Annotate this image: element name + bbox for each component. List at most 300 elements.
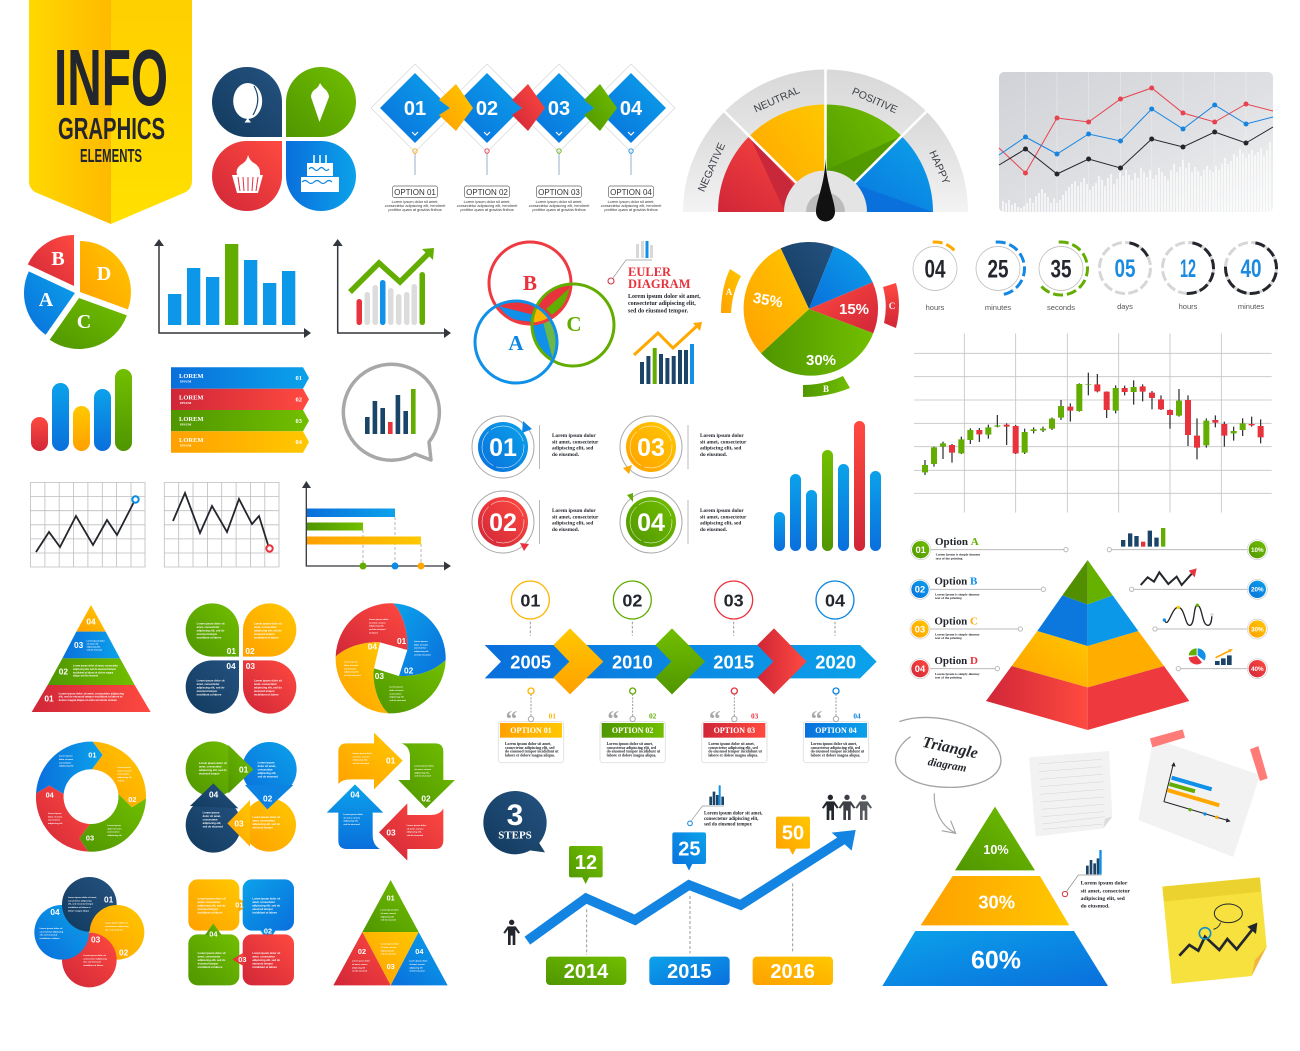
teardrop quad: amet, consectetur (254, 625, 277, 629)
tab C: C (889, 301, 895, 311)
option titles: Option C (934, 615, 978, 627)
arrow cycle: sed do eiusmod (353, 763, 370, 765)
rounded squares: amet, consectetur (252, 900, 275, 904)
gauge separators (723, 68, 928, 212)
step numbers: 01 (404, 98, 426, 120)
overlapping circles: incididunt ut labore et (68, 906, 91, 909)
ring cycle: consectetur (117, 773, 130, 776)
panel: 3D pyramid with options (910, 528, 1267, 730)
panel: gauge (683, 68, 968, 222)
layered triangle: sed do eiusmod (87, 650, 103, 652)
rounded squares: eiusmod tempor (198, 907, 218, 911)
body text: Lorem ipsum dolor sit amet, (628, 294, 701, 300)
circle captions: sit amet, consectetur (552, 439, 599, 445)
icon: wave (1163, 604, 1214, 625)
gauge needle (816, 158, 835, 222)
overlapping circles: Lorem ipsum dolor sit (40, 928, 62, 930)
teardrop quad: Lorem ipsum dolor sit (197, 679, 225, 682)
tab A (721, 269, 741, 313)
timer labels: hours (1179, 302, 1198, 311)
gauge facets (750, 136, 933, 212)
ribbon numbers: 01 (296, 375, 302, 382)
overlapping circles: consectetur adipiscing (83, 957, 108, 960)
swirl circle: consectetur (414, 647, 426, 650)
growth callout: sed do eiusmod tempor. (704, 823, 752, 828)
3 steps bubble: STEPS (498, 830, 532, 842)
layered triangle: Lorem ipsum dolor sit amet, consectetur (73, 666, 118, 668)
step numbers: 04 (620, 98, 643, 120)
option labels: OPTION 01 (394, 188, 436, 197)
ring cycle: 01 (88, 751, 96, 760)
bar chart: rising arrow (333, 239, 451, 338)
pointed drop flower: sed do eiusmod (203, 825, 223, 829)
option card 01: “ (506, 707, 517, 733)
year box 2014 (546, 957, 626, 985)
circle captions: Lorem ipsum dolor (700, 508, 744, 514)
rounded squares: 03 (238, 955, 246, 964)
segmented triangle: adipiscing elit (381, 915, 394, 918)
swirl circle: adipiscing elit (414, 650, 429, 653)
end marker (266, 545, 273, 552)
pointed drop flower: Lorem ipsum dolor sit (252, 816, 280, 819)
circle captions: adipiscing elit, sed (700, 446, 741, 452)
circle captions (552, 433, 747, 533)
swirl circle: Lorem ipsum dolor (369, 619, 389, 621)
gauge hub (784, 170, 867, 212)
option captions: Lorem ipsum dolor sit amet, (392, 200, 438, 204)
arrow cycle: Lorem ipsum dolor (343, 814, 363, 816)
slice D (80, 241, 131, 309)
leader lines (413, 149, 633, 175)
option captions: porttitor quam at gravida finibus (460, 208, 514, 212)
step numbers: 03 (548, 98, 570, 120)
gauge labels: POSITIVE (850, 86, 899, 116)
overlapping circles: Lorem ipsum dolor sit (83, 955, 106, 957)
pointed drop flower: adipiscing elit, sed do (252, 822, 280, 826)
petal: cupcake (212, 141, 282, 211)
layered triangle: 02 (59, 667, 68, 677)
pointed drop flower: eiusmod tempor (252, 825, 273, 829)
green trend arrow (350, 254, 428, 292)
circle captions: Lorem ipsum dolor (552, 508, 596, 514)
icon: three people (822, 795, 872, 820)
step numbers: 02 (476, 98, 498, 120)
layered triangle: Lorem ipsum dolor (87, 641, 105, 643)
arrow cycle (327, 733, 455, 861)
swirl circle: Lorem ipsum (344, 662, 358, 664)
slice B (28, 235, 74, 286)
timer 05 days (1095, 238, 1155, 298)
panel: speech bubble chart (343, 364, 439, 460)
timer labels: days (1117, 302, 1133, 311)
option labels: OPTION 03 (538, 188, 580, 197)
circle captions: do eiusmod. (700, 527, 728, 533)
bubble outline (343, 364, 439, 460)
layered triangle: Lorem ipsum dolor sit amet, consectetur adipiscing (59, 692, 124, 695)
tab B (803, 376, 850, 397)
leader (613, 260, 652, 278)
rounded squares: Lorem ipsum dolor sit (252, 952, 280, 955)
circle captions: sit amet, consectetur (552, 514, 599, 520)
pointed drop flower: Lorem ipsum (258, 761, 274, 764)
gauge labels (696, 84, 952, 194)
teardrop quad: amet, consectetur (254, 682, 277, 686)
triangle tier 10 percent: 10% (983, 843, 1009, 857)
circle captions: adipiscing elit, sed (552, 521, 593, 527)
segmented triangle: 04 (415, 947, 424, 956)
swirl circle: dolor sit amet (389, 689, 404, 692)
swirl circle: sed do eiusmod (344, 675, 361, 677)
rounded squares: 01 (235, 901, 243, 910)
segmented triangle: sit amet, consec (352, 963, 368, 966)
icon: person (503, 920, 520, 945)
pointed drop flower: amet, consectetur (199, 764, 222, 768)
timeline years: 2005 (510, 651, 551, 672)
segmented triangle: adipiscing elit (352, 966, 366, 969)
panel: timeline and growth (483, 581, 877, 985)
ribbon labels: LOREM (179, 394, 204, 402)
timer 04 hours (906, 240, 964, 297)
icon: mini bars (1121, 528, 1165, 547)
teardrop quad: incididunt ut labore (197, 635, 222, 639)
growth callout: Lorem ipsum dolor sit amet, (704, 811, 762, 816)
heading: DIAGRAM (628, 277, 691, 291)
mini bars (636, 241, 653, 258)
segmented triangle: Lorem ipsum dolor (381, 944, 399, 946)
layered triangle: incididunt ut labore et dolore magna (73, 671, 114, 674)
option card 02 (600, 688, 665, 763)
arrow cycle: 03 (386, 827, 396, 837)
ribbon sublabels: IPSUM (180, 422, 192, 426)
option card 03: OPTION 03 (714, 726, 755, 735)
taped chart note (1138, 729, 1268, 857)
circle captions: adipiscing elit, sed (700, 521, 741, 527)
pointed drop flower: 02 (263, 793, 273, 803)
segmented triangle: sed do eiusmod (381, 954, 397, 956)
pointed drop flower: consectetur (203, 818, 218, 822)
timer 25 minutes (969, 240, 1027, 297)
dashed date guides (587, 883, 793, 955)
heading: EULER (628, 265, 671, 279)
slice red 15 percent (809, 282, 878, 333)
panel: bottom-left diagrams (32, 603, 455, 987)
body text: sed do eiusmod tempor. (628, 308, 689, 314)
option captions (935, 553, 981, 680)
option card 01 (498, 688, 564, 763)
rounded squares: 02 (264, 926, 272, 935)
panel: Euler caption (608, 241, 702, 384)
option captions: text of the printing (935, 596, 962, 600)
year box 2014: 2014 (564, 961, 608, 983)
curved arrow (934, 793, 956, 833)
option boxes (392, 186, 654, 198)
blue diamonds (380, 73, 666, 143)
growth callout: consectetur adipiscing elit, (704, 817, 759, 822)
ring cycle: adipiscing elit (48, 822, 63, 825)
option card 02: labore et dolore magna aliqua. (607, 753, 656, 757)
timer 04 hours: 04 (924, 256, 946, 284)
panel: ribbon list (171, 367, 309, 453)
panel: Euler diagram (475, 242, 614, 383)
ribbon sublabels: IPSUM (180, 380, 192, 384)
bar chart: tall rounded bars (774, 421, 881, 551)
petal: ice cream (286, 67, 356, 137)
ring cycle (36, 742, 146, 852)
gauge red segment (718, 136, 826, 212)
slice navy (781, 242, 834, 309)
teardrop quad: adipiscing elit, sed do (254, 628, 282, 632)
option captions: text of the printing (935, 636, 962, 640)
timer 12 hours (1158, 238, 1218, 298)
ribbon sublabels: IPSUM (180, 401, 192, 405)
panel: triangle diagram and notes (882, 717, 1268, 986)
ring cycle: consectetur (107, 831, 120, 834)
leader dot (608, 278, 614, 284)
lined paper note (1029, 751, 1112, 837)
right badges: 30% (1251, 626, 1264, 633)
circle captions: sit amet, consectetur (700, 439, 747, 445)
segmented triangle: 02 (358, 947, 366, 956)
swirl circle: consectetur (389, 692, 402, 695)
timeline years (510, 651, 856, 672)
gauge hub inner (806, 192, 845, 212)
timer 12 hours: 12 (1180, 255, 1196, 283)
option titles (934, 536, 979, 667)
axes (338, 244, 445, 333)
option card 01: consectetur adipiscing elit, sed (505, 746, 555, 750)
teardrop quad: 02 (245, 646, 255, 656)
ring cycle: dolor sit amet (107, 827, 122, 830)
teardrop quad: eiusmod tempor (254, 632, 275, 636)
rounded squares: Lorem ipsum dolor sit (198, 898, 226, 901)
pointed drop flower: dolor sit amet, (258, 764, 276, 768)
axis arrowheads (333, 239, 451, 338)
slice blue (809, 247, 873, 309)
right badges: 40% (1251, 666, 1264, 673)
option card 04: “ (811, 707, 822, 733)
teardrop quad: adipiscing elit, sed do (254, 685, 282, 689)
segmented triangle: Lorem ipsum dolor (352, 961, 370, 963)
circle A (475, 301, 557, 383)
left badges: 04 (915, 664, 926, 674)
timeline numbers (520, 590, 845, 610)
option captions: Lorem Ipsum is simply dummy (935, 592, 980, 596)
pointed drop flower: adipiscing elit, (258, 771, 276, 775)
option captions: Lorem Ipsum is simply dummy (936, 553, 980, 557)
overlapping circles: elit, sed eiusmod (83, 961, 102, 964)
pointed drop flower: consectetur (258, 767, 273, 771)
green arrowhead (422, 248, 434, 260)
ring cycle: consectetur (48, 819, 60, 822)
option captions (385, 200, 662, 212)
teardrop quad: eiusmod tempor (197, 632, 217, 636)
axes (159, 244, 305, 333)
circle 02 (472, 491, 534, 553)
triangle tier 10 percent (955, 807, 1035, 870)
panel: party icon quatrefoil (212, 67, 356, 211)
teardrop quad: adipiscing elit, sed do (197, 628, 225, 632)
overlapping circles: Lorem ipsum dolor sit amet, (68, 897, 97, 899)
dividers (540, 425, 688, 544)
rounded squares: amet, consectetur (198, 900, 220, 904)
rounded squares: amet, consectetur (252, 954, 275, 958)
timeline arrow band (485, 645, 877, 678)
yellow sticky note (1162, 877, 1267, 984)
end marker (132, 496, 139, 503)
rounded squares: adipiscing elit, sed do (198, 958, 226, 962)
rounded squares (188, 879, 294, 985)
swirl circle: adipiscing elit (389, 696, 404, 699)
swirl circle: dolor sit amet (414, 643, 428, 646)
overlapping circles: consectetur adipiscing (40, 930, 64, 933)
percent labels: 35% (752, 290, 784, 312)
option titles: Option B (934, 576, 978, 588)
pin 50 (776, 817, 810, 855)
gauge green segment (826, 104, 902, 212)
timeline numbers: 01 (520, 590, 540, 610)
overlapping circles: dolore magna aliqua (68, 910, 90, 912)
option captions: porttitor quam at gravida finibus (604, 208, 658, 212)
icon: mini pie (1189, 648, 1206, 664)
timer 40 minutes (1221, 238, 1281, 298)
arrow cycle: sed do eiusmod (407, 835, 424, 837)
slice letters: C (77, 311, 91, 333)
option labels: OPTION 04 (610, 188, 652, 197)
bar chart: horizontal gantt (302, 481, 451, 570)
gauge blue segment (826, 136, 933, 212)
layered triangle: dolore magna aliqua ut enim ad minim veniam (59, 698, 118, 702)
rounded squares: incididunt ut labore (252, 911, 277, 915)
segmented triangle: adipiscing elit (381, 949, 394, 952)
ring cycle: adipiscing elit (107, 834, 122, 837)
option card 03 (702, 688, 767, 763)
ribbon labels (179, 373, 204, 444)
red series (999, 86, 1273, 176)
option captions: consectetur adipiscing elit, hendrerit (457, 204, 518, 208)
overlapping circles: elit, sed eiusmod tempor (68, 903, 94, 906)
layered triangle: sit amet, elit (87, 643, 98, 646)
pointed drop flower: Lorem ipsum dolor sit (199, 762, 227, 765)
arrow cycle: sit amet, consec (407, 827, 424, 830)
option card 02: “ (607, 707, 619, 733)
pin 12: 12 (575, 852, 597, 874)
swirl circle: adipiscing elit (344, 671, 359, 674)
circle 01 (472, 416, 534, 478)
triangle tier 60 percent (882, 931, 1108, 986)
swirl circle (336, 603, 446, 713)
arrow cycle: sed do eiusmod (414, 776, 431, 778)
arrow cycle: adipiscing elit, (407, 831, 422, 834)
bubble bars (365, 389, 416, 434)
option card 04 (803, 688, 869, 763)
option card 04: 04 (853, 711, 861, 720)
ring cycle: adipiscing elit (59, 765, 74, 768)
ring cycle: dolor sit amet (48, 815, 62, 818)
gauge baseline cover (683, 212, 968, 222)
option card 02: Lorem ipsum dolor sit amet, (607, 742, 653, 746)
option captions: consectetur adipiscing elit, hendrerit (385, 204, 446, 208)
layered triangle: 01 (44, 694, 54, 704)
axis arrowheads (302, 481, 451, 570)
histogram (1003, 142, 1270, 212)
year box 2016: 2016 (770, 961, 815, 983)
pointed drop flower: eiusmod tempor (199, 771, 220, 775)
sketch oval (896, 717, 1001, 787)
grid (914, 333, 1272, 513)
growth arrowhead (832, 830, 856, 851)
ring cycle: 03 (86, 833, 94, 842)
panel: rising line grid chart (30, 482, 145, 567)
tab C (883, 283, 899, 328)
pointed drop flower: dolor sit amet, (203, 814, 221, 818)
ring cycle: dolor sit amet (59, 758, 73, 761)
slice C (50, 298, 127, 349)
mini bar highlight (646, 241, 648, 258)
segmented triangle: sed do eiusmod (409, 971, 425, 973)
panel: title banner (29, 0, 192, 224)
option card 03: labore et dolore magna aliqua. (708, 753, 758, 757)
rounded squares: eiusmod tempor (198, 961, 218, 965)
segmented triangle: 03 (387, 962, 395, 971)
slice letters: D (97, 263, 111, 285)
arrow cycle: sit amet, consec (414, 768, 432, 771)
option labels (394, 188, 652, 197)
triangle callout (1062, 850, 1131, 910)
circle 01: 01 (489, 434, 517, 462)
panel: big pie chart (721, 242, 899, 397)
ring cycle: dolor sit amet (117, 769, 132, 772)
option captions: Lorem Ipsum is simply dummy (935, 632, 980, 636)
pin 50: 50 (782, 823, 804, 845)
option card 01: do eiusmod tempor incididunt ut (505, 750, 559, 754)
axis arrowheads (154, 239, 311, 338)
ring cycle: consectetur (59, 761, 71, 764)
body text: consectetur adipiscing elit, (628, 301, 696, 307)
ribbon labels: LOREM (179, 373, 204, 380)
swirl circle: Lorem ipsum (389, 687, 403, 689)
layered triangle: elit, sed do eiusmod tempor incididunt ut labore et (59, 695, 123, 699)
pyramid green layer (1062, 560, 1113, 604)
icon: zigzag arrow (1141, 568, 1197, 585)
layered triangle: 03 (74, 640, 84, 650)
circle 03 (620, 416, 682, 478)
option card 02: consectetur adipiscing elit, sed (607, 746, 657, 750)
rounded squares: incididunt ut labore (198, 911, 223, 915)
bars and arrow chart (634, 322, 702, 384)
red candles (952, 384, 1261, 453)
teardrop quad: adipiscing elit, sed do (197, 685, 225, 689)
swirl circle: 03 (375, 671, 384, 681)
pin 25 (672, 832, 706, 871)
teardrop quad: 04 (226, 661, 236, 671)
ring cycle: 04 (46, 790, 55, 799)
bars (356, 272, 425, 325)
ring cycle: adipiscing elit (117, 776, 132, 779)
icon: mini bars arrow (1215, 649, 1233, 665)
option card 01: 01 (549, 711, 556, 720)
step numbers (404, 98, 643, 120)
gauge labels: NEGATIVE (696, 141, 728, 194)
ribbon sublabels: IPSUM (180, 444, 192, 448)
growth arrow line (527, 838, 845, 941)
ribbon numbers: 04 (296, 439, 303, 446)
segmented triangle: sed do eiusmod (352, 971, 368, 973)
option captions: porttitor quam at gravida finibus (388, 208, 442, 212)
falling line (173, 493, 269, 548)
layered triangle: aliqua sed do eiusmod (73, 676, 99, 678)
option captions: porttitor quam at gravida finibus (532, 208, 586, 212)
pointed drop flower: 01 (239, 765, 249, 775)
